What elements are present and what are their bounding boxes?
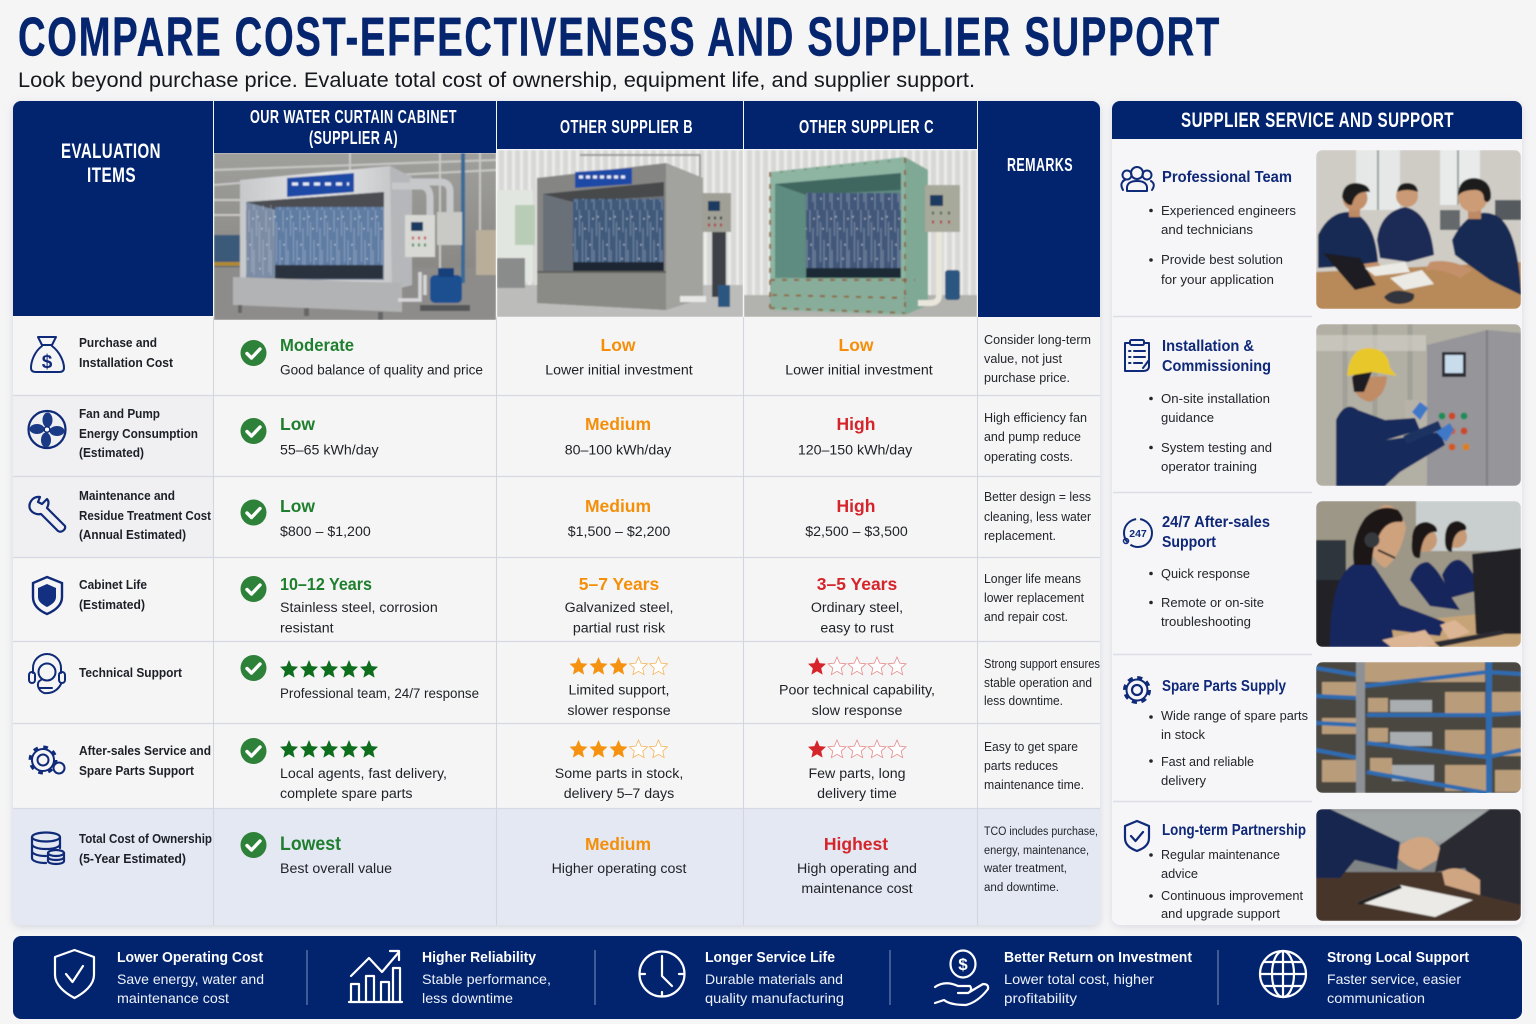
row: after-sales and spare parts — [30, 738, 1084, 802]
column header: supplier B: OTHER SUPPLIER B — [560, 117, 693, 137]
row: technical support — [29, 654, 1100, 719]
label: Cabinet Life — [79, 578, 147, 592]
supplier A value: Low — [280, 414, 315, 434]
supplier A rating — [240, 738, 447, 802]
supplier B rating: slower response — [567, 703, 671, 719]
supplier A value: 10–12 Years — [280, 574, 372, 594]
bullets — [1149, 391, 1272, 474]
text — [1004, 950, 1192, 1006]
column header: supplier B — [497, 101, 743, 149]
supplier A value — [240, 832, 392, 877]
label — [79, 744, 211, 778]
bullets: On-site installation — [1161, 391, 1270, 406]
remark: Strong support ensures — [984, 657, 1100, 671]
supplier B value: Medium — [585, 496, 651, 516]
remark — [984, 333, 1091, 385]
text — [422, 950, 551, 1006]
remark: Easy to get spare — [984, 740, 1078, 754]
bullets: Continuous improvement — [1161, 888, 1303, 903]
remark — [984, 411, 1087, 464]
icon: gear — [1125, 678, 1149, 702]
section: professional team — [1121, 150, 1521, 309]
supplier B value — [545, 335, 693, 378]
icon: gears — [30, 748, 64, 774]
remark: Better design = less — [984, 490, 1091, 504]
supplier B rating: Limited support, — [569, 682, 669, 698]
remark: cleaning, less water — [984, 510, 1091, 524]
photo: warehouse shelves — [1316, 662, 1521, 793]
label: After-sales Service and — [79, 744, 211, 758]
remark: value, not just — [984, 352, 1063, 366]
remark: replacement. — [984, 529, 1056, 543]
supplier A value — [240, 414, 379, 458]
bullets: and technicians — [1161, 222, 1254, 237]
supplier B value: Galvanized steel, — [565, 600, 673, 616]
bullets: Remote or on-site — [1161, 595, 1264, 610]
remark: and downtime. — [984, 882, 1059, 894]
bottom benefits banner — [13, 936, 1522, 1019]
benefit: longer service life — [640, 950, 844, 1006]
bullets: Quick response — [1161, 566, 1250, 581]
supplier A rating: Local agents, fast delivery, — [280, 766, 447, 782]
supplier B rating — [555, 740, 683, 802]
supplier B value: 80–100 kWh/day — [565, 442, 672, 458]
icon: shield check — [1125, 821, 1149, 851]
supplier B value: Lower initial investment — [545, 362, 693, 378]
remark: parts reduces — [984, 759, 1058, 773]
photo: supplier A cabinet — [214, 153, 496, 320]
icon: 24/7 clock — [1124, 519, 1152, 547]
row: fan and pump energy — [28, 407, 1087, 464]
label: Total Cost of Ownership — [79, 832, 212, 846]
supplier C value: High — [837, 496, 875, 516]
photo: supplier C rusty cabinet — [744, 150, 977, 317]
supplier C value: Lower initial investment — [785, 362, 933, 378]
text: Longer Service Life — [705, 950, 835, 966]
panel: supplier service and support — [1112, 101, 1522, 927]
supplier C rating — [808, 740, 906, 802]
photo: technician at control cabinet — [1316, 324, 1521, 486]
bullets: Experienced engineers — [1161, 203, 1297, 218]
column header: remarks — [978, 101, 1100, 317]
supplier B value — [552, 834, 686, 877]
column header: supplier C: OTHER SUPPLIER C — [799, 117, 934, 137]
section: 24/7 after-sales support — [1124, 501, 1521, 650]
subtitle: Look beyond purchase price. Evaluate total cost of ownership, equipment life, and supplier support. — [18, 68, 975, 92]
supplier B rating: delivery 5–7 days — [564, 786, 674, 802]
icon: coin stack — [32, 832, 64, 864]
supplier C value: 3–5 Years — [817, 574, 897, 594]
icon: clock — [640, 952, 684, 996]
supplier C value: easy to rust — [820, 620, 894, 636]
text: Lower Operating Cost — [117, 950, 263, 966]
remark: lower replacement — [984, 591, 1085, 605]
label — [79, 489, 212, 542]
remark: High efficiency fan — [984, 411, 1087, 425]
supplier C rating: slow response — [812, 703, 902, 719]
remark — [984, 657, 1100, 708]
bullets: for your application — [1161, 272, 1274, 287]
supplier A value: Moderate — [280, 335, 354, 355]
text: maintenance cost — [117, 990, 229, 1006]
supplier A rating: complete spare parts — [280, 786, 412, 802]
label: (Estimated) — [79, 446, 144, 460]
column header: supplier A: OUR WATER CURTAIN CABINET — [250, 107, 457, 127]
icon: fan — [28, 411, 66, 448]
icon: headset — [29, 654, 65, 693]
supplier A value: $800 – $1,200 — [280, 524, 371, 540]
heading: 24/7 After-sales — [1162, 514, 1270, 531]
icon: shield — [33, 577, 62, 614]
text — [705, 950, 844, 1006]
text: Higher Reliability — [422, 950, 536, 966]
icon: 24/7 clock: 247 — [1129, 528, 1147, 540]
label: Fan and Pump — [79, 407, 160, 421]
text: less downtime — [422, 990, 513, 1006]
remark: maintenance time. — [984, 778, 1084, 792]
supplier B value: partial rust risk — [573, 620, 666, 636]
column header: supplier C — [744, 101, 977, 149]
supplier C value: Highest — [824, 834, 888, 854]
supplier C value: $2,500 – $3,500 — [805, 524, 908, 540]
supplier A rating — [240, 655, 479, 702]
benefit: better return on investment — [935, 950, 1192, 1006]
photo: engineers at table — [1316, 150, 1521, 309]
supplier C rating — [779, 657, 935, 719]
heading — [1162, 338, 1271, 375]
section: long-term partnership — [1125, 809, 1521, 921]
supplier A value — [240, 335, 483, 378]
photo: supplier B cabinet — [497, 150, 743, 317]
supplier A value: Best overall value — [280, 861, 392, 877]
bullets — [1149, 708, 1308, 788]
supplier C value: High operating and — [797, 861, 917, 877]
remark: Consider long-term — [984, 333, 1091, 347]
row: total cost of ownership — [32, 826, 1098, 897]
bullets: Wide range of spare parts — [1161, 708, 1308, 723]
supplier B rating — [567, 657, 671, 719]
panel: comparison table — [13, 101, 1100, 927]
column header: supplier A: (SUPPLIER A) — [309, 128, 398, 148]
remark: operating costs. — [984, 450, 1073, 464]
label: Maintenance and — [79, 489, 175, 503]
bullets: Regular maintenance — [1161, 847, 1280, 862]
remark: Longer life means — [984, 572, 1081, 586]
text: Strong Local Support — [1327, 950, 1469, 966]
bullets: System testing and — [1161, 440, 1272, 455]
heading: Spare Parts Supply — [1162, 678, 1286, 695]
section: installation and commissioning — [1125, 324, 1521, 486]
benefit: lower operating cost — [55, 950, 264, 1006]
supplier A value: 55–65 kWh/day — [280, 442, 379, 458]
supplier B value — [565, 414, 672, 458]
text: Faster service, easier — [1327, 971, 1461, 987]
supplier B value: Medium — [585, 414, 651, 434]
column header: evaluation items: EVALUATION — [61, 140, 161, 163]
text: Lower total cost, higher — [1004, 971, 1154, 987]
supplier C rating: Poor technical capability, — [779, 682, 935, 698]
heading: Support — [1162, 534, 1217, 551]
remark: TCO includes purchase, — [984, 826, 1098, 838]
supplier C value — [811, 574, 903, 636]
bullets: troubleshooting — [1161, 614, 1251, 629]
remark — [984, 740, 1084, 792]
label: Purchase and — [79, 336, 157, 350]
remark — [983, 826, 1098, 894]
photo: call center — [1316, 501, 1521, 650]
remark: purchase price. — [984, 371, 1070, 385]
supplier C value — [798, 414, 913, 458]
supplier A value: Good balance of quality and price — [280, 362, 483, 378]
supplier A value: Low — [280, 496, 315, 516]
label — [79, 336, 174, 370]
label: Spare Parts Support — [79, 764, 195, 778]
supplier A value: Stainless steel, corrosion — [280, 600, 438, 616]
column header: evaluation items — [13, 101, 213, 316]
benefit: higher reliability — [349, 950, 551, 1006]
supplier A value: Lowest — [280, 834, 342, 855]
icon: growth chart — [349, 951, 402, 1002]
section: spare parts supply — [1125, 662, 1521, 793]
icon: globe — [1260, 951, 1306, 997]
supplier C value: 120–150 kWh/day — [798, 442, 913, 458]
supplier A rating: Professional team, 24/7 response — [280, 686, 479, 702]
supplier C rating: delivery time — [817, 786, 897, 802]
supplier C value: Ordinary steel, — [811, 600, 903, 616]
bullets: advice — [1161, 866, 1198, 881]
heading: Professional Team — [1162, 169, 1292, 186]
row: maintenance and residue cost — [29, 489, 1091, 543]
supplier B rating: Some parts in stock, — [555, 766, 683, 782]
icon: money bag — [31, 337, 64, 373]
label — [79, 407, 198, 460]
text: communication — [1327, 990, 1425, 1006]
label: Residue Treatment Cost — [79, 509, 212, 523]
supplier B value: Higher operating cost — [552, 861, 686, 877]
remark: energy, maintenance, — [984, 845, 1089, 857]
text: Stable performance, — [422, 971, 551, 987]
supplier B value: Low — [600, 335, 636, 355]
remark: less downtime. — [984, 694, 1063, 708]
column header: supplier A — [214, 101, 496, 153]
bullets: Fast and reliable — [1161, 754, 1254, 769]
bullets — [1149, 203, 1297, 287]
remark: stable operation and — [984, 676, 1092, 690]
remark: and pump reduce — [984, 430, 1081, 444]
bullets: Provide best solution — [1161, 252, 1283, 267]
supplier B value — [568, 496, 670, 540]
supplier A value — [240, 574, 438, 636]
heading: Commissioning — [1162, 358, 1271, 375]
remark — [984, 490, 1091, 543]
supplier B value — [565, 574, 673, 636]
column header: remarks: REMARKS — [1007, 155, 1073, 175]
supplier A value: resistant — [280, 620, 334, 636]
supplier A value — [240, 496, 371, 540]
text: Better Return on Investment — [1004, 950, 1192, 966]
bullets — [1149, 566, 1264, 629]
remark — [984, 572, 1085, 624]
label: Technical Support — [79, 666, 183, 680]
supplier B value: Medium — [585, 834, 651, 854]
bullets: guidance — [1161, 410, 1214, 425]
icon: money bag: $ — [42, 352, 53, 373]
supplier C value: maintenance cost — [801, 881, 913, 897]
remark: and repair cost. — [984, 610, 1068, 624]
icon: wrench — [29, 497, 65, 532]
heading — [1162, 514, 1270, 551]
supplier C value: Low — [838, 335, 874, 355]
text — [117, 950, 264, 1006]
bullets: and upgrade support — [1161, 906, 1280, 921]
supplier C rating: Few parts, long — [808, 766, 906, 782]
label: (Estimated) — [79, 598, 145, 612]
label: (5-Year Estimated) — [79, 852, 186, 866]
supplier C value — [805, 496, 908, 540]
column header: evaluation items: ITEMS — [87, 164, 136, 187]
label: Energy Consumption — [79, 427, 198, 441]
supplier C value: High — [837, 414, 875, 434]
icon: team — [1121, 167, 1154, 191]
text — [1327, 950, 1469, 1006]
label: Installation Cost — [79, 356, 174, 370]
row: cabinet life — [33, 572, 1085, 636]
remark: water treatment, — [983, 863, 1067, 875]
label — [79, 578, 147, 612]
supplier C value — [797, 834, 917, 897]
icon: shield check — [55, 950, 94, 998]
icon: hand with coin — [935, 950, 988, 1005]
icon: clipboard — [1125, 340, 1149, 371]
text: quality manufacturing — [705, 990, 844, 1006]
text: Durable materials and — [705, 971, 843, 987]
bullets: delivery — [1161, 773, 1207, 788]
text: profitability — [1004, 990, 1077, 1006]
text: Save energy, water and — [117, 971, 264, 987]
supplier C value — [785, 335, 933, 378]
row: purchase and installation cost — [31, 333, 1091, 385]
benefit: better return on investment: $ — [958, 955, 968, 974]
benefit: strong local support — [1260, 950, 1469, 1006]
label — [79, 832, 212, 866]
supplier B value: $1,500 – $2,200 — [568, 524, 670, 540]
photo: handshake — [1316, 809, 1521, 921]
bullets: in stock — [1161, 727, 1205, 742]
heading: Installation & — [1162, 338, 1254, 355]
bullets: operator training — [1161, 459, 1257, 474]
heading: Long-term Partnership — [1162, 822, 1306, 839]
bullets — [1149, 847, 1303, 921]
supplier B value: 5–7 Years — [579, 574, 659, 594]
label: (Annual Estimated) — [79, 528, 186, 542]
